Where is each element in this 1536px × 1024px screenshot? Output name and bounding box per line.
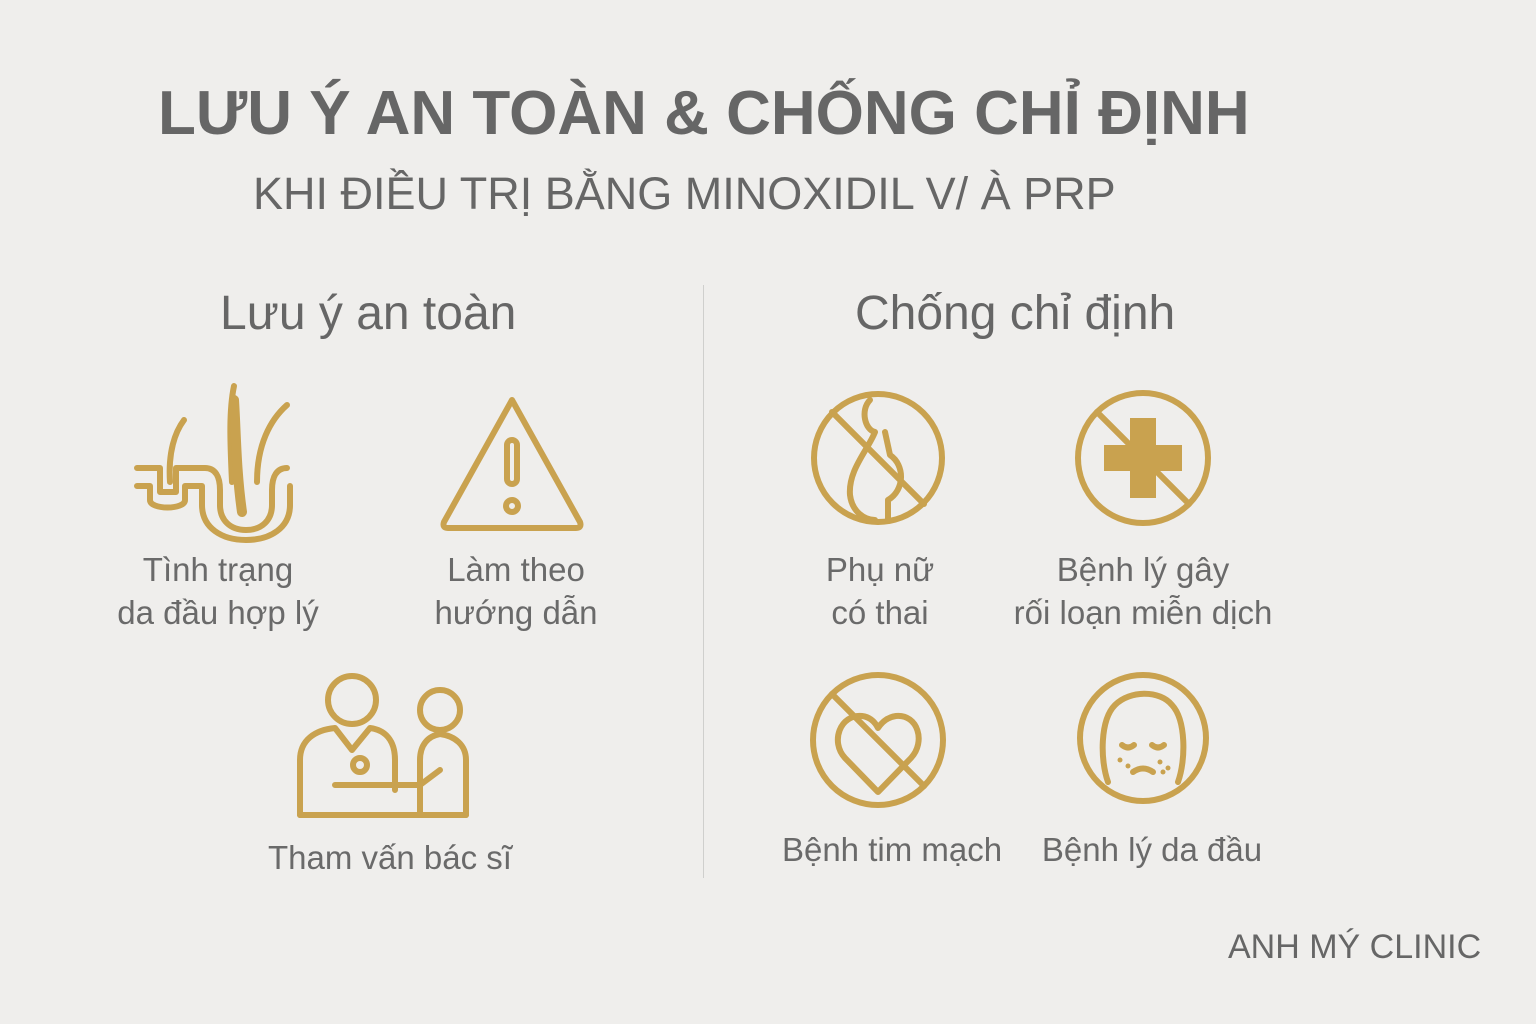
icon: doctor consultation [300,676,466,815]
icon: pregnant no [814,394,942,522]
icon: heart no [813,675,943,805]
icon: warning triangle [444,400,580,528]
label: scalp [117,551,319,631]
label: instructions: Làm theo [447,551,585,588]
label: scalp: Tình trạng [143,551,293,588]
icon: face acne [1080,675,1206,801]
label: consult: Tham vấn bác sĩ [268,839,512,876]
label: instructions: hướng dẫn [434,594,598,631]
subtitle: KHI ĐIỀU TRỊ BẰNG MINOXIDIL V/ À PRP [253,168,1116,219]
label: immune: rối loạn miễn dịch [1014,594,1272,631]
heading: contraindications: Chống chỉ định [855,287,1175,340]
title: LƯU Ý AN TOÀN & CHỐNG CHỈ ĐỊNH [158,79,1250,148]
icon: cross no [1078,393,1208,523]
icon: hair follicle [137,386,290,540]
divider [703,285,704,878]
label: immune: Bệnh lý gây [1057,551,1229,588]
label: heart: Bệnh tim mạch [782,831,1002,868]
brand: ANH MÝ CLINIC [1228,928,1481,966]
label: pregnant [826,551,934,631]
label: scalp disease: Bệnh lý da đầu [1042,831,1262,868]
heading: safety: Lưu ý an toàn [220,287,516,340]
label: instructions [434,551,598,631]
label: pregnant: có thai [831,594,929,631]
label: pregnant: Phụ nữ [826,551,934,588]
label: scalp: da đầu hợp lý [117,594,319,631]
label: immune [1014,551,1272,631]
